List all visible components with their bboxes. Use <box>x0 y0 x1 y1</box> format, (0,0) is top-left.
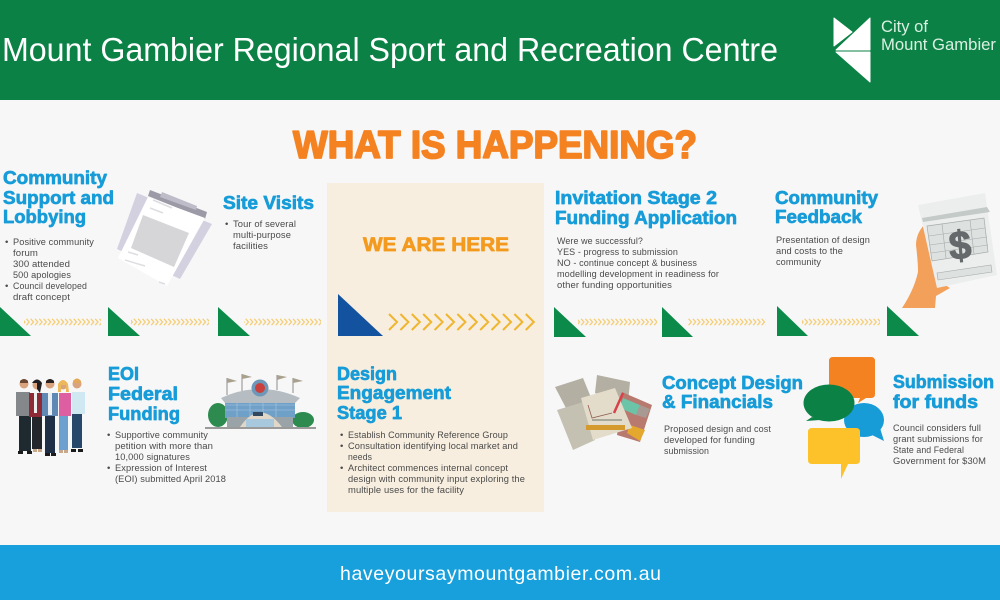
text: funding application result: YES - progress to submission <box>557 247 678 258</box>
text: community support bullets: 500 apologies <box>13 270 71 281</box>
heading: Invitation Stage 2 Funding Application: Invitation Stage 2 <box>555 187 717 208</box>
logo: City of Mount Gambier: City of <box>881 18 928 36</box>
text: concept design body <box>664 424 771 457</box>
text: design engagement bullets: Architect commences internal concept <box>348 463 508 474</box>
text: community support bullets: forum <box>13 248 38 259</box>
text: design engagement bullets: • <box>340 430 343 441</box>
heading: Invitation Stage 2 Funding Application: Funding Application <box>555 207 737 228</box>
text: concept design body: submission <box>664 446 709 457</box>
text: community support bullets: • <box>5 281 8 292</box>
text: submission body: State and Federal <box>893 445 964 456</box>
icon: stadium building <box>205 374 316 429</box>
heading: Submission for funds <box>893 371 994 412</box>
text: EOI bullets: (EOI) submitted April 2018 <box>115 474 226 485</box>
heading: Community Support and Lobbying: Support and <box>3 187 114 208</box>
icon: speech bubbles <box>804 357 884 479</box>
text: funding application result <box>557 236 720 291</box>
heading: EOI Federal Funding <box>108 363 180 424</box>
text: community support bullets: Positive community <box>13 237 94 248</box>
text: EOI bullets: 10,000 signatures <box>115 452 190 463</box>
heading: Community Feedback: Feedback <box>775 206 863 227</box>
icon: group of people <box>16 378 85 456</box>
text: community support bullets: Council developed <box>13 281 87 292</box>
text: submission body: grant submissions for <box>893 434 984 445</box>
text: community feedback body <box>776 235 870 268</box>
text: EOI bullets: • <box>107 463 110 474</box>
footer band <box>0 545 1000 600</box>
logo: City of Mount Gambier <box>834 18 997 82</box>
icon: stack of papers <box>117 190 212 286</box>
text: EOI bullets: Supportive community <box>115 430 208 441</box>
icon: hand holding invoice <box>902 193 997 308</box>
text: community feedback body: community <box>776 257 821 268</box>
icon: hand holding invoice: $ <box>947 223 973 269</box>
text: EOI bullets: petition with more than <box>115 441 213 452</box>
text: design engagement bullets: Consultation identifying local market and <box>348 441 518 452</box>
text: funding application result: Were we successful? <box>557 236 643 247</box>
header band <box>0 0 1000 100</box>
text: concept design body: developed for funding <box>664 435 755 446</box>
heading: Community Support and Lobbying: Lobbying <box>3 206 86 227</box>
heading: Design Engagement Stage 1 <box>337 363 451 423</box>
text: site visits bullets: • <box>225 219 228 230</box>
heading: Invitation Stage 2 Funding Application <box>555 187 737 228</box>
main heading: WHAT IS HAPPENING? <box>293 124 697 167</box>
text: design engagement bullets: • <box>340 463 343 474</box>
panel: we are here <box>327 183 544 512</box>
text: design engagement bullets: multiple uses for the facility <box>348 485 464 496</box>
text: design engagement bullets: • <box>340 441 343 452</box>
text: EOI bullets: • <box>107 430 110 441</box>
heading: Site Visits: Site Visits <box>223 192 314 213</box>
text: design engagement bullets: needs <box>348 452 372 463</box>
arrow: large chevrons <box>389 314 534 330</box>
text: funding application result: modelling development in readiness for <box>557 269 720 280</box>
text: community feedback body: Presentation of design <box>776 235 870 246</box>
title: Mount Gambier Regional Sport and Recreation Centre <box>2 31 778 68</box>
icon: design documents <box>555 375 652 450</box>
heading: Community Feedback <box>775 187 879 227</box>
heading: Design Engagement Stage 1: Design <box>337 363 397 384</box>
text: EOI bullets: Expression of Interest <box>115 463 207 474</box>
text: site visits bullets: facilities <box>233 241 268 252</box>
text: community support bullets: 300 attended <box>13 259 70 270</box>
text: community support bullets: draft concept <box>13 292 70 303</box>
heading: Concept Design & Financials: Concept Design <box>662 372 803 393</box>
timeline arrows: small chevrons <box>24 317 880 327</box>
text: site visits bullets: Tour of several <box>233 219 296 230</box>
text: concept design body: Proposed design and cost <box>664 424 771 435</box>
footer url: haveyoursaymountgambier.com.au <box>340 563 661 585</box>
text: site visits bullets <box>225 219 296 252</box>
heading: Concept Design & Financials: & Financials <box>662 391 773 412</box>
logo: City of Mount Gambier: Mount Gambier <box>881 36 997 54</box>
text: community feedback body: and costs to the <box>776 246 843 257</box>
timeline markers: green triangles <box>0 306 919 337</box>
heading: Design Engagement Stage 1: Engagement <box>337 382 451 403</box>
marker: blue triangle <box>338 294 383 336</box>
heading: Design Engagement Stage 1: Stage 1 <box>337 402 402 423</box>
text: submission body <box>893 423 986 467</box>
heading: Submission for funds: Submission <box>893 371 994 392</box>
text: funding application result: NO - continue concept & business <box>557 258 697 269</box>
callout: we are here: WE ARE HERE <box>363 235 509 256</box>
heading: Submission for funds: for funds <box>893 391 978 412</box>
heading: EOI Federal Funding: EOI <box>108 363 139 384</box>
text: funding application result: other funding opportunities <box>557 280 672 291</box>
text: design engagement bullets: design with community input exploring the <box>348 474 525 485</box>
text: site visits bullets: multi-purpose <box>233 230 291 241</box>
text: submission body: Government for $30M <box>893 456 986 467</box>
text: submission body: Council considers full <box>893 423 981 434</box>
heading: Community Support and Lobbying <box>3 167 114 227</box>
text: design engagement bullets: Establish Community Reference Group <box>348 430 508 441</box>
heading: EOI Federal Funding: Funding <box>108 403 180 424</box>
text: community support bullets <box>5 237 94 303</box>
text: EOI bullets <box>107 430 226 485</box>
heading: Community Support and Lobbying: Community <box>3 167 108 188</box>
heading: Community Feedback: Community <box>775 187 879 208</box>
heading: EOI Federal Funding: Federal <box>108 383 178 404</box>
text: design engagement bullets <box>340 430 525 496</box>
text: community support bullets: • <box>5 237 8 248</box>
heading: Concept Design & Financials <box>662 372 803 412</box>
